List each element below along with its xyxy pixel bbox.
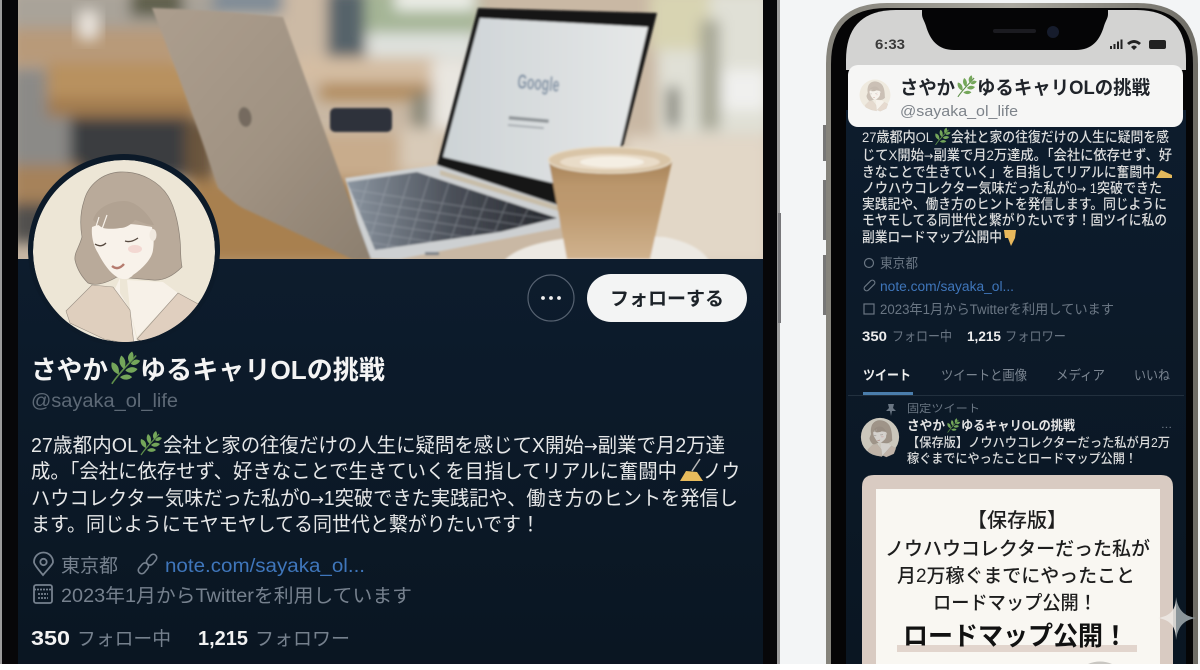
tabs: メディア bbox=[1056, 367, 1105, 383]
notch bbox=[922, 9, 1108, 50]
right bio: 実践記や、働き方のヒントを発信します。同じように bbox=[862, 196, 1167, 212]
pinned tweet: ... bbox=[1161, 419, 1172, 431]
sparkle watermark bbox=[1158, 597, 1196, 640]
bio: 成。「会社に依存せず、好きなことで生きていくを目指してリアルに奮闘中 bbox=[31, 460, 677, 483]
profile panel bbox=[18, 259, 763, 664]
status icons bbox=[1110, 40, 1166, 50]
handle: @sayaka_ol_life bbox=[31, 391, 178, 412]
follow button: フォローする bbox=[610, 288, 724, 310]
right follow stats: フォロワー bbox=[1005, 329, 1066, 344]
tabs: いいね bbox=[1134, 368, 1170, 383]
screen logo: Google bbox=[517, 71, 560, 97]
tabs: ツイートと画像 bbox=[941, 368, 1027, 383]
location row: note.com/sayaka_ol... bbox=[165, 556, 365, 577]
right location: 東京都 bbox=[880, 256, 918, 271]
header handle: @sayaka_ol_life bbox=[900, 103, 1018, 120]
bio: ハウコレクター気味だった私が0→1突破できた実践記や、働き方のヒントを発信し bbox=[31, 487, 738, 510]
header card: ゆるキャリOLの挑戦 bbox=[977, 77, 1150, 99]
right bio: きなことで生きていく」を目指してリアルに奮闘中 bbox=[862, 164, 1155, 180]
right follow stats: 1,215 bbox=[967, 329, 1001, 344]
joined date row: 2023年1月からTwitterを利用しています bbox=[61, 585, 412, 607]
pinned tweet bbox=[861, 402, 1172, 466]
follow stats bbox=[31, 628, 350, 650]
follow button bbox=[587, 274, 747, 322]
right phone bbox=[823, 3, 1198, 670]
avatar bbox=[28, 154, 220, 347]
display name bbox=[31, 351, 385, 385]
right bio: じてX開始→副業で月2万達成。「会社に依存せず、好 bbox=[862, 147, 1172, 163]
more button bbox=[528, 275, 574, 321]
display name: ゆるキャリOLの挑戦 bbox=[140, 355, 385, 385]
right bio: 会社と家の往復だけの人生に疑問を感 bbox=[951, 129, 1169, 145]
pinned tweet: ゆるキャリOLの挑戦 bbox=[961, 418, 1075, 433]
laptop screen bbox=[437, 8, 657, 205]
saucer bbox=[504, 236, 708, 259]
right link: note.com/sayaka_ol... bbox=[880, 279, 1014, 294]
right follow stats: フォロー中 bbox=[892, 329, 952, 344]
tweet avatar bbox=[861, 418, 899, 457]
roadmap image card: ロードマップ公開！ bbox=[933, 592, 1097, 614]
header name: さやか bbox=[900, 77, 955, 99]
right follow stats: 350 bbox=[862, 329, 887, 344]
pinned tweet: 固定ツイート bbox=[907, 402, 980, 415]
roadmap image card: 月2万稼ぐまでにやったこと bbox=[897, 565, 1135, 587]
right location bbox=[864, 256, 918, 271]
follow stats: 350 bbox=[31, 628, 70, 650]
left phone bbox=[0, 0, 781, 664]
bio: 会社と家の往復だけの人生に疑問を感じてX開始→副業で月2万達 bbox=[163, 434, 725, 457]
location row bbox=[34, 552, 365, 577]
hinge strip bbox=[440, 170, 558, 211]
tabs: ツイート bbox=[863, 368, 911, 383]
roadmap image card bbox=[862, 475, 1173, 664]
bio bbox=[31, 431, 740, 536]
apple logo bbox=[238, 106, 252, 128]
bio: 27歳都内OL bbox=[31, 434, 138, 457]
roadmap image card: 【保存版】 bbox=[967, 509, 1067, 532]
right bio: モヤモしてる同世代と繋がりたいです！固ツイに私の bbox=[862, 212, 1167, 228]
pinned tweet: 【保存版】ノウハウコレクターだった私が月2万 bbox=[907, 435, 1170, 450]
display name: さやか bbox=[31, 355, 108, 385]
location row: 東京都 bbox=[61, 555, 118, 577]
laptop lid back bbox=[152, 8, 371, 259]
right bio: 27歳都内OL bbox=[862, 129, 933, 145]
follow stats: 1,215 bbox=[198, 628, 248, 650]
status time: 6:33 bbox=[875, 37, 906, 52]
phone screen bbox=[846, 10, 1186, 670]
right bio bbox=[862, 128, 1172, 246]
bio: ます。同じようにモヤモヤしてる同世代と繋がりたいです！ bbox=[31, 513, 540, 536]
right bio: ノウハウコレクター気味だった私が0→ 1突破できた bbox=[862, 180, 1162, 196]
tabs bbox=[848, 367, 1184, 396]
right bio: 副業ロードマップ公開中 bbox=[862, 229, 1002, 245]
follow stats: フォロワー bbox=[255, 629, 350, 650]
pinned tweet: さやか bbox=[907, 418, 945, 433]
follow stats: フォロー中 bbox=[77, 628, 171, 650]
latte glass bbox=[549, 162, 672, 259]
laptop keyboard deck bbox=[345, 165, 560, 259]
roadmap image card: ノウハウコレクターだった私が bbox=[885, 538, 1150, 560]
camera and speaker bbox=[993, 26, 1059, 38]
bio: ノウ bbox=[703, 461, 740, 483]
roadmap image card: ロードマップ公開！ bbox=[903, 621, 1128, 651]
pinned tweet: 稼ぐまでにやったことロードマップ公開！ bbox=[907, 451, 1137, 466]
bottom white strip bbox=[0, 664, 1200, 670]
right joined date: 2023年1月からTwitterを利用しています bbox=[880, 302, 1114, 317]
header avatar bbox=[860, 80, 890, 111]
banner photo bbox=[10, 0, 772, 271]
right phone frame bbox=[823, 125, 827, 161]
right follow stats bbox=[862, 329, 1066, 344]
highlight underline bbox=[897, 645, 1137, 652]
header card bbox=[848, 65, 1183, 127]
left phone frame bbox=[0, 0, 780, 664]
